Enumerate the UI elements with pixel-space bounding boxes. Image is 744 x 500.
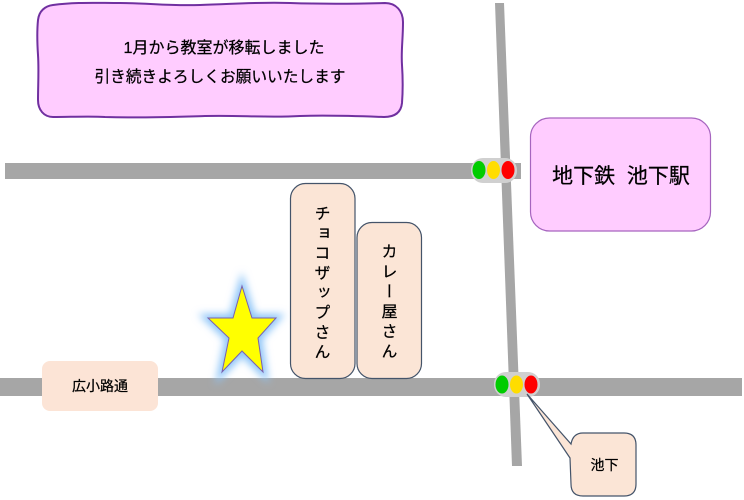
road: upper horizontal street <box>5 163 521 179</box>
shop: Chocozap <box>290 184 355 378</box>
star: classroom location <box>208 286 276 372</box>
shop name: curry restaurant: カレー屋さん <box>378 243 398 363</box>
traffic light: upper junction <box>471 158 517 183</box>
panel: subway station <box>530 118 710 231</box>
callout text: 池下 <box>590 457 618 473</box>
road: vertical street <box>495 3 522 466</box>
notice text <box>94 39 346 86</box>
shop: curry restaurant <box>357 222 422 378</box>
notice text: 引き続きよろしくお願いいたします <box>94 68 346 86</box>
road label: Hirokoji street <box>42 361 158 411</box>
road: lower horizontal street <box>0 378 742 396</box>
callout: Ikeshita intersection <box>527 394 636 496</box>
shop name: Chocozap: チョコザップさん <box>312 205 330 363</box>
road label text: 広小路通 <box>72 378 128 394</box>
station name: 地下鉄 池下駅 <box>552 165 690 188</box>
notice panel: classroom relocation <box>37 3 403 117</box>
notice text: 1月から教室が移転しました <box>124 39 324 57</box>
traffic light: lower junction <box>494 372 540 397</box>
